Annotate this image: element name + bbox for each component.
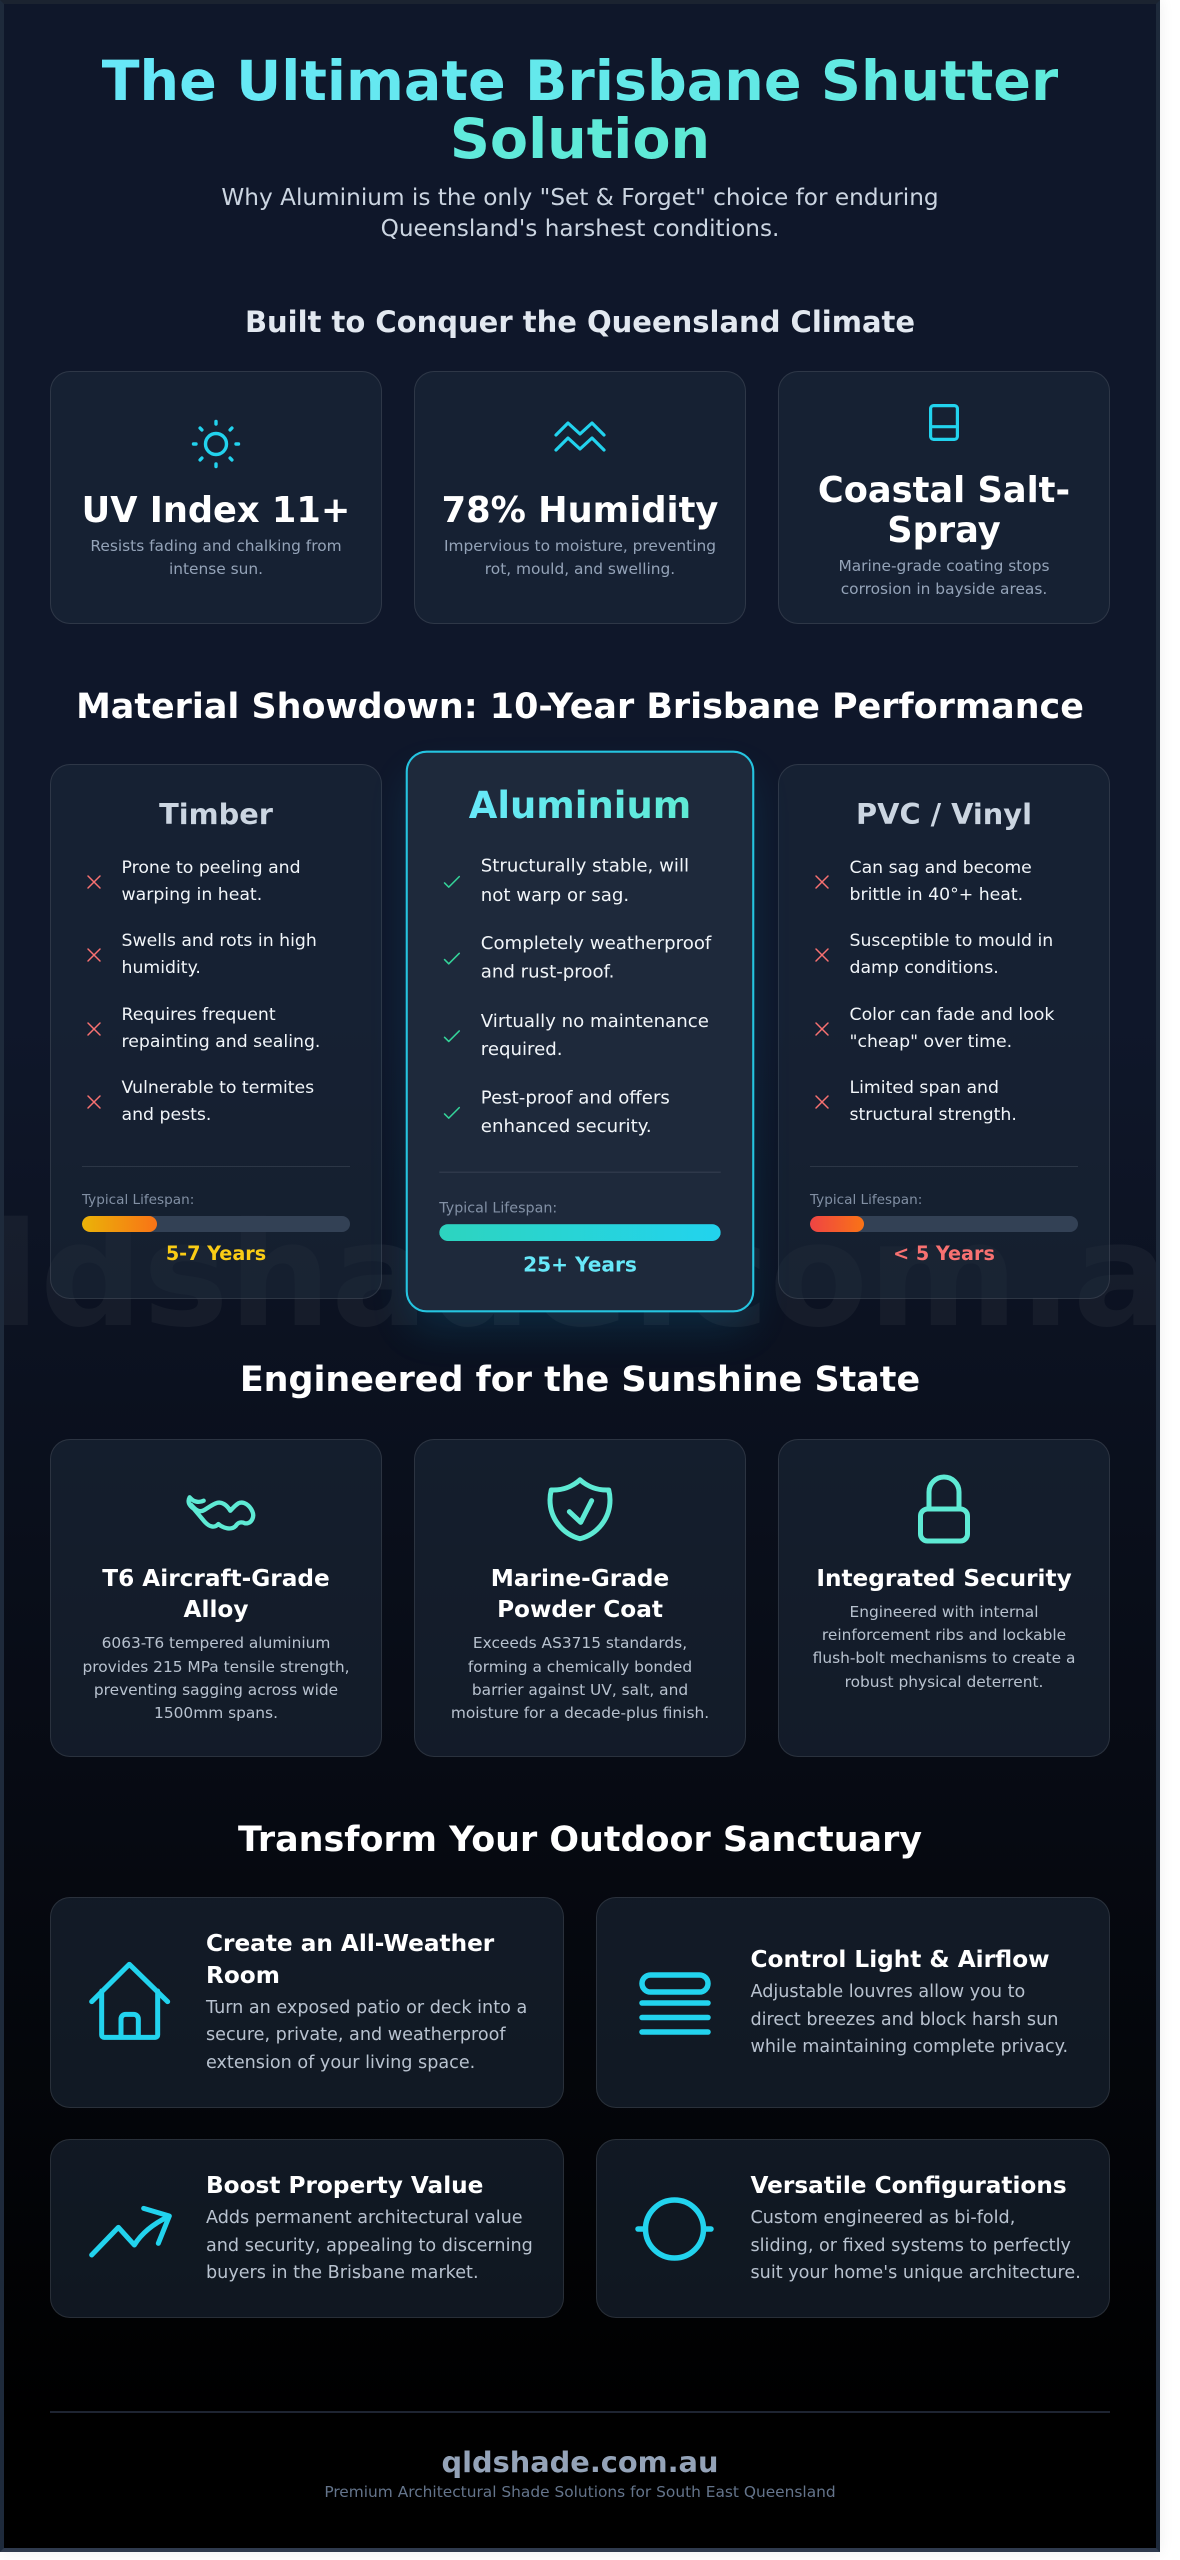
icon: waves [554, 421, 606, 452]
panel: configurations [596, 2139, 1110, 2318]
benefit text: while maintaining complete privacy. [750, 2037, 1068, 2057]
text: UV description: Resists fading and chalking from [90, 537, 342, 555]
list item: enhanced security. [481, 1116, 652, 1137]
list item: required. [481, 1039, 563, 1060]
benefit title: Control Light & Airflow [750, 1946, 1050, 1973]
feature text: preventing sagging across wide [94, 1681, 338, 1699]
panel: aluminium highlight [406, 751, 754, 1312]
benefit text: direct breezes and block harsh sun [750, 2010, 1058, 2030]
feature title [102, 1564, 330, 1623]
footer tagline: Premium Architectural Shade Solutions for South East Queensland [324, 2483, 836, 2501]
benefit text: and security, appealing to discerning [206, 2236, 533, 2256]
heading: material showdown: Material Showdown: 10-Year Brisbane Performance [76, 687, 1084, 727]
lifespan bar: PVC: Typical Lifespan: [810, 1192, 922, 1208]
text: humidity description: Impervious to moisture, preventing [444, 537, 716, 555]
feature text: Engineered with internal [850, 1603, 1038, 1621]
benefit title: Versatile Configurations [750, 2172, 1067, 2199]
subtitle [221, 184, 939, 242]
list item [815, 1078, 1017, 1125]
subtitle: Queensland's harshest conditions. [381, 215, 779, 242]
panel: humidity [414, 371, 746, 624]
icon: panel [929, 404, 959, 441]
list item: Swells and rots in high [122, 931, 317, 951]
list item [444, 1011, 709, 1060]
benefit text: suit your home's unique architecture. [750, 2263, 1081, 2283]
text: salt spray description [838, 556, 1050, 598]
list item [815, 1005, 1054, 1052]
title: Solution [450, 107, 710, 172]
feature title: Powder Coat [497, 1596, 663, 1623]
list item: Virtually no maintenance [481, 1011, 709, 1032]
stat: salt spray [818, 470, 1070, 550]
list item: damp conditions. [850, 958, 999, 978]
list item: humidity. [122, 958, 201, 978]
column title: timber: Timber [159, 797, 273, 831]
column title: PVC: PVC / Vinyl [856, 797, 1032, 831]
benefit text: secure, private, and weatherproof [206, 2025, 506, 2045]
subtitle: Why Aluminium is the only "Set & Forget" choice for enduring [221, 184, 939, 210]
benefit text: Adds permanent architectural value [206, 2208, 523, 2228]
list item: Prone to peeling and [122, 858, 301, 878]
benefit text [206, 1998, 527, 2072]
panel: PVC [778, 764, 1110, 1299]
lifespan bar: aluminium [439, 1172, 721, 1298]
footer [50, 2411, 1110, 2511]
list item: and pests. [122, 1105, 211, 1125]
footer brand: qldshade.com.au [442, 2445, 718, 2479]
benefit text: buyers in the Brisbane market. [206, 2263, 479, 2283]
list item: Structurally stable, will [481, 856, 689, 877]
stat: UV Index: UV Index 11+ [82, 490, 350, 531]
feature title [491, 1564, 669, 1623]
icon: louvres [639, 1972, 711, 2035]
list item: structural strength. [850, 1105, 1017, 1125]
text: salt spray description: Marine-grade coating stops [838, 556, 1050, 574]
feature text [82, 1634, 350, 1722]
column title: aluminium: Aluminium [469, 784, 691, 827]
stat: salt spray: Coastal Salt- [818, 470, 1070, 511]
icon: trend arrow [89, 2206, 172, 2258]
panel: salt spray [778, 371, 1110, 624]
panel: T6 alloy [50, 1439, 382, 1757]
panel: security [778, 1439, 1110, 1757]
feature title: Integrated Security [816, 1564, 1072, 1592]
list item [815, 931, 1053, 978]
list item: warping in heat. [122, 885, 262, 905]
text block [750, 1946, 1068, 2057]
panel: all-weather room [50, 1897, 564, 2108]
feature text: provides 215 MPa tensile strength, [82, 1658, 350, 1676]
benefit title: Boost Property Value [206, 2172, 483, 2199]
benefit title: Room [206, 1962, 280, 1989]
panel: timber [50, 764, 382, 1299]
title [102, 48, 1058, 172]
heading: engineered: Engineered for the Sunshine State [240, 1360, 920, 1400]
panel: UV index [50, 371, 382, 624]
heading: transform: Transform Your Outdoor Sanctuary [238, 1820, 922, 1860]
icon: house [89, 1962, 170, 2040]
icon: lock [918, 1474, 970, 1544]
list item: Pest-proof and offers [481, 1088, 670, 1109]
feature text: barrier against UV, salt, and [472, 1681, 688, 1699]
benefit text: sliding, or fixed systems to perfectly [750, 2236, 1071, 2256]
panel: light and airflow [596, 1897, 1110, 2108]
text block [206, 2172, 533, 2283]
feature text: robust physical deterrent. [845, 1673, 1043, 1691]
icon: circle [627, 2180, 723, 2276]
lifespan bar: timber [82, 1166, 350, 1286]
lifespan bar: PVC: < 5 Years [893, 1242, 995, 1265]
lifespan bar: timber: Typical Lifespan: [82, 1192, 194, 1208]
icon: handshake [186, 1495, 256, 1531]
feature text: forming a chemically bonded [468, 1658, 692, 1676]
feature text [451, 1634, 709, 1722]
list item: Requires frequent [122, 1005, 276, 1025]
icon: shield check [548, 1477, 612, 1542]
text: UV description [90, 537, 342, 578]
feature text: Exceeds AS3715 standards, [473, 1634, 687, 1652]
list item [87, 1005, 320, 1052]
text: salt spray description: corrosion in bayside areas. [841, 580, 1047, 598]
icon: sun [192, 420, 240, 468]
lifespan bar: aluminium: 25+ Years [523, 1253, 637, 1277]
list item: Vulnerable to termites [122, 1078, 314, 1098]
lifespan bar: aluminium: Typical Lifespan: [439, 1200, 557, 1217]
lifespan bar: PVC [810, 1166, 1078, 1286]
list item: and rust-proof. [481, 962, 614, 983]
list item: Can sag and become [850, 858, 1032, 878]
text: UV description: intense sun. [169, 560, 263, 578]
text: humidity description [444, 537, 716, 578]
stat: salt spray: Spray [887, 510, 1001, 550]
list item: Susceptible to mould in [850, 931, 1053, 951]
benefit text [750, 1982, 1068, 2057]
benefit title [206, 1930, 494, 1989]
benefit text: Turn an exposed patio or deck into a [206, 1998, 527, 2018]
feature text: 6063-T6 tempered aluminium [102, 1634, 330, 1652]
feature title: Marine-Grade [491, 1564, 669, 1592]
benefit text: Adjustable louvres allow you to [750, 1982, 1025, 2002]
list item [87, 1078, 314, 1125]
heading: climate section: Built to Conquer the Queensland Climate [245, 305, 915, 339]
text block [206, 1930, 527, 2072]
list item: "cheap" over time. [850, 1032, 1012, 1052]
feature title: T6 Aircraft-Grade [102, 1564, 330, 1592]
feature text [812, 1603, 1075, 1691]
title: The Ultimate Brisbane Shutter [102, 48, 1058, 114]
feature text: 1500mm spans. [154, 1704, 278, 1722]
lifespan bar: timber: 5-7 Years [166, 1242, 266, 1265]
list item: Limited span and [850, 1078, 999, 1098]
feature title: Alloy [184, 1596, 248, 1623]
panel: property value [50, 2139, 564, 2318]
list item [444, 856, 689, 906]
feature text: flush-bolt mechanisms to create a [813, 1649, 1075, 1667]
text: humidity description: rot, mould, and swelling. [485, 560, 675, 578]
list item: Completely weatherproof [481, 933, 711, 954]
list item [815, 858, 1032, 905]
stat: humidity: 78% Humidity [442, 490, 718, 531]
list item [87, 858, 301, 905]
panel: powder coat [414, 1439, 746, 1757]
list item [87, 931, 317, 978]
list item [444, 933, 712, 983]
list item: brittle in 40°+ heat. [850, 885, 1023, 905]
list item: Color can fade and look [850, 1005, 1054, 1025]
feature text: moisture for a decade-plus finish. [451, 1704, 709, 1722]
list item: not warp or sag. [481, 885, 629, 906]
list item: repainting and sealing. [122, 1032, 320, 1052]
list item [444, 1088, 670, 1137]
text block [750, 2170, 1081, 2287]
feature text: reinforcement ribs and lockable [822, 1626, 1066, 1644]
benefit text [750, 2205, 1081, 2287]
benefit text: extension of your living space. [206, 2052, 475, 2072]
benefit text: Custom engineered as bi-fold, [750, 2208, 1015, 2228]
benefit text [206, 2208, 533, 2283]
benefit title: Create an All-Weather [206, 1930, 494, 1957]
